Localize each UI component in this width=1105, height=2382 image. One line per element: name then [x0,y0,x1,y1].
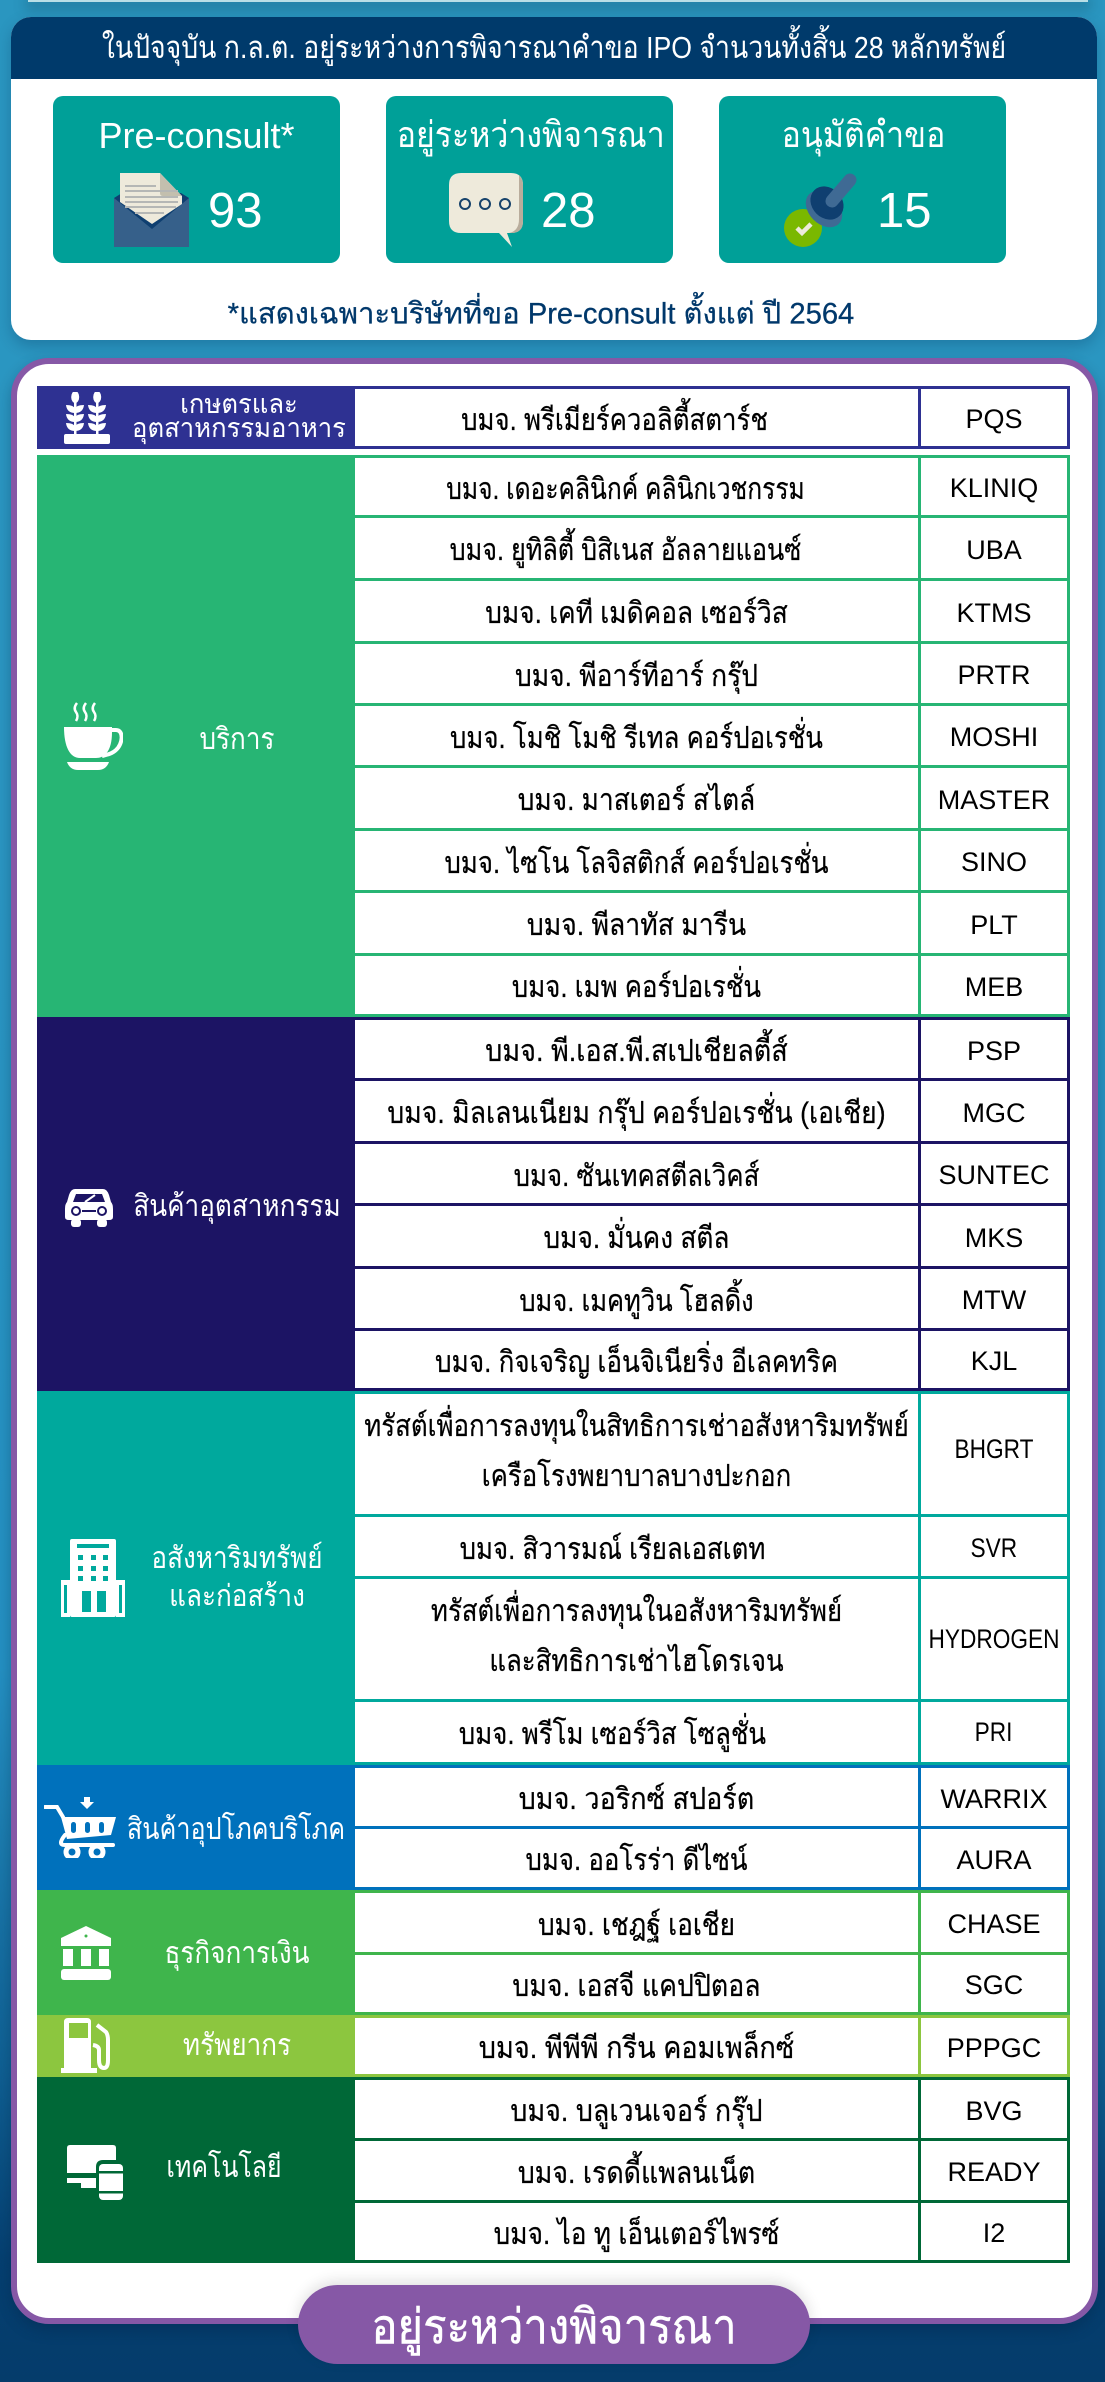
row: PQS: บมจ. พรีเมียร์ควอลิตี้สตาร์ช [461,404,768,436]
row: MGC [355,1078,1070,1144]
category: finance [37,1890,1070,2015]
row: BHGRT [355,1391,1070,1517]
row: AURA [355,1826,1070,1890]
row: KJL: บมจ. กิจเจริญ เอ็นจิเนียริ่ง อีเลคทริค [435,1346,838,1378]
row: MKS: MKS [965,1222,1023,1252]
icon: envelope with letter [114,173,189,247]
row: SVR: SVR [971,1533,1017,1563]
card: Pre-consult [53,96,340,263]
row: MGC: บมจ. มิลเลนเนียม กรุ๊ป คอร์ปอเรชั่น (เอเชีย) [387,1097,886,1130]
category name: สินค้าอุปโภคบริโภค [127,1813,345,1846]
panel: IPO summary [11,17,1097,340]
row: KTMS: บมจ. เคที เมดิคอล เซอร์วิส [485,597,788,630]
category name: ธุรกิจการเงิน [164,1937,310,1970]
row: WARRIX: WARRIX [940,1784,1048,1814]
row: MEB: บมจ. เมพ คอร์ปอเรชั่น [512,971,761,1004]
row: UBA: บมจ. ยูทิลิตี้ บิสิเนส อัลลายแอนซ์ [450,534,801,567]
category label [37,1765,355,1890]
row: MOSHI [355,703,1070,768]
row: HYDROGEN: และสิทธิการเช่าไฮโดรเจน [489,1644,784,1678]
icon: wheat [64,392,110,444]
icon: shopping cart [44,1797,116,1858]
icon: building [61,1539,125,1617]
row: BVG: BVG [965,2096,1023,2126]
category label [37,455,355,1017]
category: property [37,1391,1070,1765]
title pill [298,2285,810,2364]
row: MKS [355,1203,1070,1269]
row: SUNTEC [355,1141,1070,1206]
row: PPPGC: PPPGC [947,2032,1041,2062]
row: I2 [355,2200,1070,2263]
category name [132,389,346,444]
icon: devices [67,2145,123,2200]
icon: bank [61,1926,111,1980]
category name: บริการ [199,723,275,756]
row: KLINIQ [355,455,1070,518]
value: 15: 15 [877,184,932,238]
category: consumer products [37,1765,1070,1890]
row: WARRIX: บมจ. วอริกซ์ สปอร์ต [519,1783,754,1816]
row: SUNTEC: SUNTEC [938,1160,1050,1190]
row: SGC: บมจ. เอสจี แคปปิตอล [512,1970,761,2002]
row: PPPGC [355,2015,1070,2077]
row: READY: บมจ. เรดดี้แพลนเน็ต [518,2156,755,2190]
row: SGC: SGC [965,1970,1023,2000]
row: READY: READY [947,2157,1041,2187]
category label [37,1017,355,1391]
category label [37,1890,355,2015]
row: PRI: PRI [975,1716,1013,1746]
row: HYDROGEN: HYDROGEN [928,1624,1060,1654]
row: BVG: บมจ. บลูเวนเจอร์ กรุ๊ป [510,2095,763,2128]
row: UBA: UBA [966,534,1022,564]
row: PRI [355,1699,1070,1765]
row: PRTR [355,641,1070,706]
category name [151,1542,323,1613]
top strip [28,0,1088,2]
row: KJL: KJL [971,1346,1017,1376]
row: PSP [355,1017,1070,1081]
category: industrial goods [37,1017,1070,1391]
row: SINO: บมจ. ไซโน โลจิสติกส์ คอร์ปอเรชั่น [444,846,829,880]
icon: car [65,1189,113,1227]
row: CHASE: บมจ. เชฎฐ์ เอเชีย [538,1908,735,1942]
row: PLT: บมจ. พีลาทัส มารีน [527,909,746,942]
category label [37,2015,355,2077]
title text: อยู่ระหว่างพิจารณา [371,2301,737,2354]
row: MGC: MGC [962,1098,1026,1128]
row: PLT: PLT [970,910,1018,940]
row: CHASE: CHASE [947,1909,1041,1939]
category name: สินค้าอุตสาหกรรม [133,1190,341,1223]
icon: approval stamp [784,174,856,247]
value: 93: 93 [208,184,263,238]
row: KJL [355,1328,1070,1391]
row: HYDROGEN: ทรัสต์เพื่อการลงทุนในอสังหาริมทรัพย์ [431,1594,842,1628]
row: MOSHI: MOSHI [950,722,1038,752]
row: AURA: บมจ. ออโรร่า ดีไซน์ [526,1844,747,1877]
row: PRTR: บมจ. พีอาร์ทีอาร์ กรุ๊ป [515,660,758,692]
row: SVR: บมจ. สิวารมณ์ เรียลเอสเตท [460,1532,765,1566]
row: PSP: บมจ. พี.เอส.พี.สเปเชียลตี้ส์ [485,1035,788,1068]
row: MASTER: บมจ. มาสเตอร์ สไตล์ [518,784,755,817]
category name: และก่อสร้าง [169,1580,305,1613]
card title: อนุมัติคำขอ [782,114,945,155]
card title: Pre-consult* [98,115,295,156]
row: KLINIQ: บมจ. เดอะคลินิกค์ คลินิกเวชกรรม [446,472,805,506]
row: WARRIX [355,1765,1070,1829]
row: SUNTEC: บมจ. ซันเทคสตีลเวิคส์ [514,1160,759,1192]
row: MEB [355,953,1070,1017]
row: I2: บมจ. ไอ ทู เอ็นเตอร์ไพรซ์ [494,2218,779,2250]
row: UBA [355,515,1070,581]
row: MTW [355,1266,1070,1331]
row: PSP: PSP [967,1036,1021,1066]
category: resources [37,2015,1070,2077]
row: PRTR: PRTR [957,660,1030,690]
footnote: *แสดงเฉพาะบริษัทที่ขอ Pre-consult ตั้งแต่ ปี 2564 [228,298,854,330]
icon: fuel pump [61,2018,110,2073]
row: I2: I2 [983,2218,1005,2248]
row: MTW: บมจ. เมคทูวิน โฮลดิ้ง [519,1284,754,1318]
row: MEB: MEB [965,972,1023,1002]
value: 28: 28 [541,184,596,238]
row: SINO [355,828,1070,893]
category label [37,2077,355,2263]
row: READY [355,2138,1070,2203]
category: agriculture [37,386,1070,449]
row: KTMS: KTMS [956,598,1032,628]
row: SVR [355,1514,1070,1579]
icon: coffee cup [64,702,123,770]
row: MASTER [355,765,1070,831]
row: PRI: บมจ. พรีโม เซอร์วิส โซลูชั่น [459,1718,766,1751]
row: CHASE [355,1890,1070,1955]
category name: เกษตรและ [180,389,298,419]
row: SINO: SINO [961,847,1027,877]
row: PPPGC: บมจ. พีพีพี กรีน คอมเพล็กซ์ [479,2032,794,2065]
category: services [37,455,1070,1017]
heading: summary banner [11,17,1097,79]
row: BHGRT: BHGRT [955,1434,1033,1464]
row: MASTER: MASTER [938,784,1050,814]
row: KTMS [355,578,1070,644]
row: SGC [355,1952,1070,2015]
row: MKS: บมจ. มั่นคง สตีล [543,1222,729,1255]
category: technology [37,2077,1070,2263]
category label [37,1391,355,1765]
category name: เทคโนโลยี [166,2151,282,2184]
row: MTW: MTW [962,1285,1026,1315]
category name: อุตสาหกรรมอาหาร [132,413,346,443]
category name: อสังหาริมทรัพย์ [151,1542,323,1575]
card: approved [719,96,1006,263]
card title: อยู่ระหว่างพิจารณา [397,114,665,155]
category name: ทรัพยากร [183,2029,291,2062]
row: BHGRT: ทรัสต์เพื่อการลงทุนในสิทธิการเช่าอสังหาริมทรัพย์ [364,1410,909,1442]
banner text: ในปัจจุบัน ก.ล.ต. อยู่ระหว่างการพิจารณาคำขอ IPO จำนวนทั้งสิ้น 28 หลักทรัพย์ [102,30,1006,65]
row: BHGRT: เครือโรงพยาบาลบางปะกอก [482,1460,791,1492]
row: KLINIQ: KLINIQ [950,473,1038,503]
category label [37,386,355,449]
row: HYDROGEN [355,1576,1070,1702]
row: AURA: AURA [956,1844,1032,1874]
row: BVG [355,2077,1070,2141]
row: MOSHI: บมจ. โมชิ โมชิ รีเทล คอร์ปอเรชั่น [450,722,823,754]
icon: speech bubble [449,173,523,247]
row: PLT [355,890,1070,956]
card: under review [386,96,673,263]
row: PQS: PQS [965,404,1023,434]
row: PQS [355,386,1070,449]
